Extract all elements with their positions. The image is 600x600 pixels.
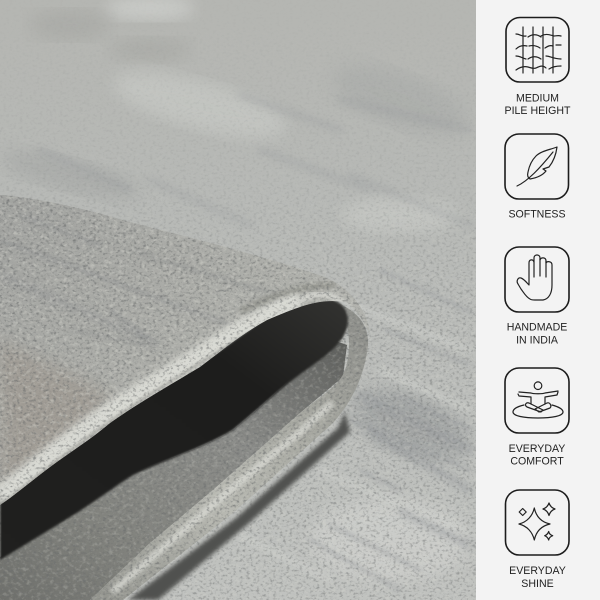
label: everyday shine: EVERYDAY xyxy=(509,565,566,577)
feature: handmade in india xyxy=(505,247,569,346)
label: handmade in india: HANDMADE xyxy=(507,322,567,334)
label: everyday comfort: EVERYDAY xyxy=(509,443,565,455)
rug fold: shadow under edge xyxy=(128,412,350,600)
feature: medium pile height xyxy=(505,18,571,117)
icon: woven pile xyxy=(506,18,569,82)
label: medium pile height: PILE HEIGHT xyxy=(505,105,571,117)
icon: open hand xyxy=(505,247,569,312)
label: handmade in india xyxy=(507,322,567,346)
label: everyday shine: SHINE xyxy=(521,578,554,590)
rug fold: top flap xyxy=(0,195,370,505)
rug fold: underside speckle xyxy=(0,300,376,600)
label: softness: SOFTNESS xyxy=(508,208,566,220)
rug fold: bound edge xyxy=(90,303,368,600)
rug fold: dark gap xyxy=(0,300,348,560)
icon: sparkles xyxy=(506,490,569,555)
label: everyday shine xyxy=(509,565,566,590)
label: everyday comfort xyxy=(509,443,565,468)
top flap: speckle xyxy=(0,190,372,510)
top flap: brownish block xyxy=(0,348,106,476)
label: handmade in india: IN INDIA xyxy=(516,334,559,346)
label: medium pile height: MEDIUM xyxy=(516,92,559,104)
icon: feather xyxy=(505,134,568,199)
floor rug: slanted streaks xyxy=(243,96,474,590)
photo: folded grey wool rug xyxy=(0,0,479,600)
feature: everyday shine xyxy=(506,490,569,590)
feature: softness xyxy=(505,134,568,220)
feature: everyday comfort xyxy=(505,368,569,468)
label: medium pile height xyxy=(505,92,571,117)
rug fold: underside panel xyxy=(0,340,347,600)
floor rug: soft tonal patches xyxy=(0,0,479,582)
icon: meditating figure xyxy=(505,368,569,433)
label: everyday comfort: COMFORT xyxy=(510,456,564,468)
floor rug: speckle xyxy=(0,90,476,600)
sidebar panel xyxy=(476,0,600,600)
